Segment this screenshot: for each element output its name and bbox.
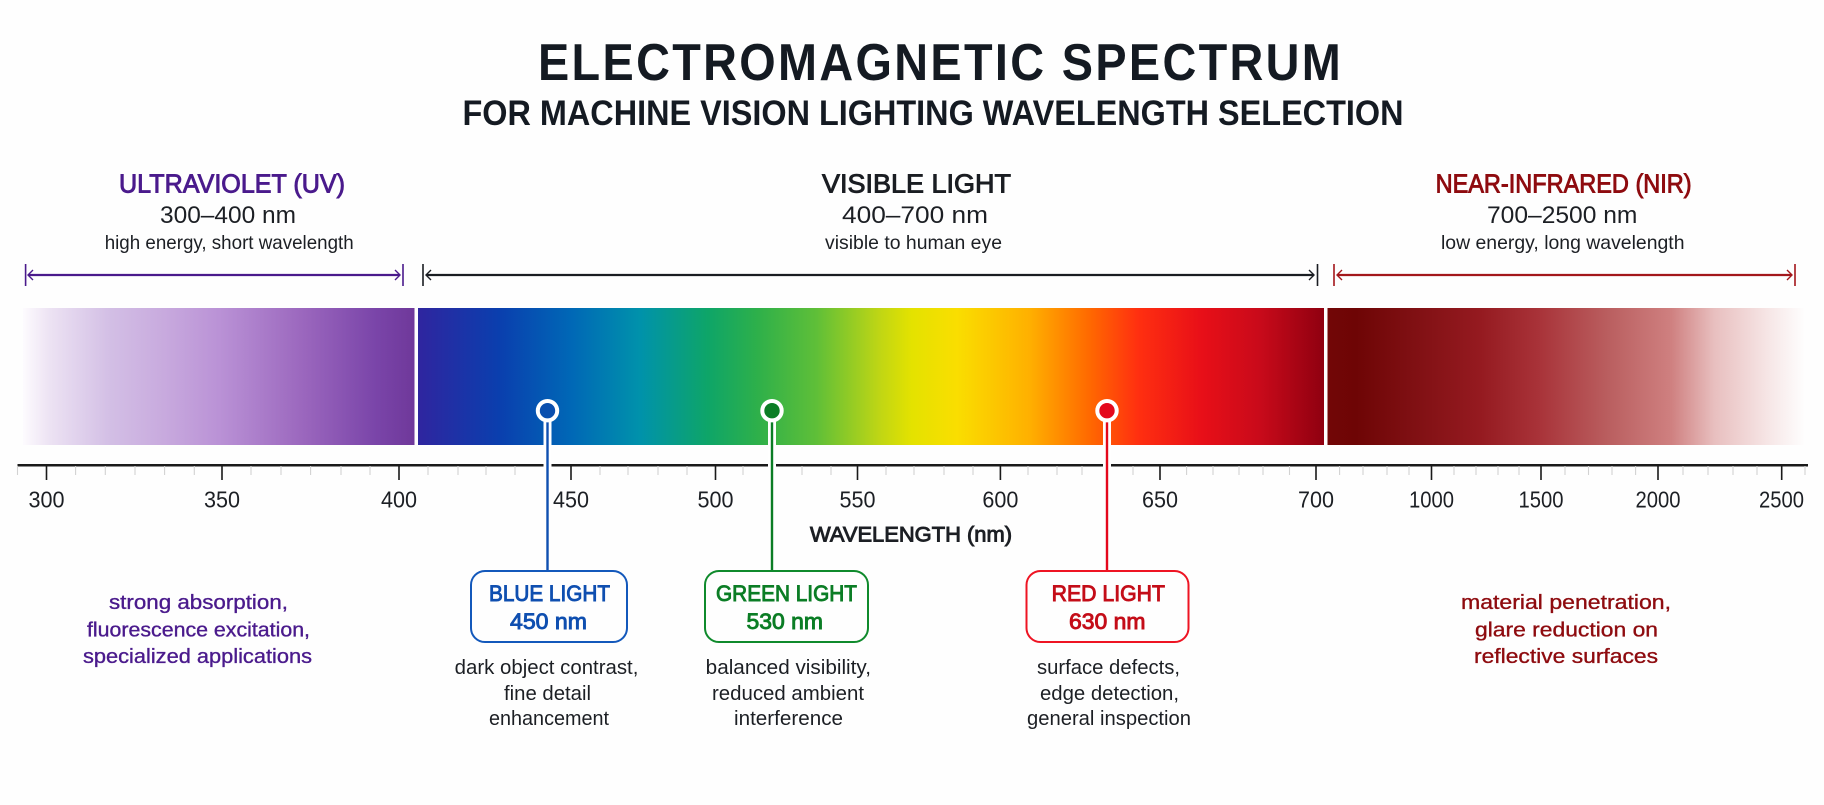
text: ultraviolet uses: specialized applications bbox=[83, 646, 312, 668]
panel: near-infrared header: low energy, long wavelength bbox=[1441, 232, 1684, 254]
panel: near-infrared header: NEAR-INFRARED (NIR) bbox=[1436, 168, 1692, 198]
wavelength axis: 550 bbox=[840, 486, 876, 512]
wavelength axis bbox=[18, 465, 1808, 512]
wavelength axis: 500 bbox=[698, 486, 734, 512]
wavelength axis: 2500 bbox=[1759, 486, 1804, 512]
spectrum bar: visible bbox=[418, 308, 1324, 445]
text: near-infrared uses: reflective surfaces bbox=[1474, 646, 1658, 668]
callout: blue light: BLUE LIGHT bbox=[489, 581, 610, 606]
text: ultraviolet uses: fluorescence excitation, bbox=[87, 620, 310, 642]
arrow: ultraviolet range bbox=[26, 264, 403, 286]
callout: green light: 530 nm bbox=[746, 609, 823, 634]
panel: visible light header: 400–700 nm bbox=[842, 202, 988, 229]
text: red light uses: surface defects, bbox=[1037, 657, 1180, 679]
text: green light uses: interference bbox=[734, 708, 843, 730]
wavelength axis: 400 bbox=[381, 486, 417, 512]
callout: red light: RED LIGHT bbox=[1052, 581, 1165, 606]
wavelength axis: 650 bbox=[1142, 486, 1178, 512]
wavelength axis: 350 bbox=[204, 486, 240, 512]
text: near-infrared uses: glare reduction on bbox=[1475, 620, 1658, 642]
spectrum bar: near-infrared bbox=[1328, 308, 1805, 445]
marker: green light bbox=[762, 401, 782, 571]
callout: red light bbox=[1026, 571, 1188, 642]
text: ultraviolet uses bbox=[83, 592, 312, 668]
panel: ultraviolet header bbox=[105, 168, 354, 254]
text: blue light uses: dark object contrast, bbox=[455, 657, 638, 679]
text: near-infrared uses: material penetration, bbox=[1461, 592, 1671, 614]
arrow: visible range bbox=[423, 264, 1318, 286]
panel: ultraviolet header: high energy, short wavelength bbox=[105, 232, 354, 254]
callout: green light bbox=[705, 571, 868, 642]
callout: blue light: 450 nm bbox=[510, 609, 587, 634]
panel: visible light header bbox=[822, 168, 1011, 254]
callout: blue light bbox=[471, 571, 627, 642]
text: near-infrared uses bbox=[1461, 592, 1671, 668]
wavelength axis: 2000 bbox=[1636, 486, 1680, 512]
subtitle: FOR MACHINE VISION LIGHTING WAVELENGTH SELECTION bbox=[462, 94, 1404, 133]
title: ELECTROMAGNETIC SPECTRUM bbox=[538, 34, 1341, 92]
panel: visible light header: VISIBLE LIGHT bbox=[822, 168, 1011, 198]
wavelength axis: 600 bbox=[982, 486, 1018, 512]
marker: red light bbox=[1097, 401, 1117, 571]
arrow: near-infrared range bbox=[1334, 264, 1795, 286]
panel: ultraviolet header: ULTRAVIOLET (UV) bbox=[119, 168, 345, 198]
text: blue light uses: fine detail bbox=[504, 683, 591, 705]
marker: blue light bbox=[538, 401, 557, 571]
text: blue light uses bbox=[455, 657, 638, 730]
wavelength axis: 450 bbox=[553, 486, 589, 512]
callout: red light: 630 nm bbox=[1069, 609, 1146, 634]
text: green light uses: balanced visibility, bbox=[706, 657, 871, 679]
spectrum bar: ultraviolet bbox=[23, 308, 414, 445]
panel: near-infrared header: 700–2500 nm bbox=[1487, 202, 1637, 229]
wavelength axis: 700 bbox=[1298, 486, 1334, 512]
text: red light uses: edge detection, bbox=[1040, 683, 1179, 705]
wavelength axis: 300 bbox=[28, 486, 64, 512]
panel: near-infrared header bbox=[1436, 168, 1692, 254]
text: green light uses: reduced ambient bbox=[712, 683, 864, 705]
text: red light uses: general inspection bbox=[1027, 708, 1191, 730]
wavelength axis: 1500 bbox=[1518, 486, 1564, 512]
wavelength axis: 1000 bbox=[1409, 486, 1454, 512]
text: ultraviolet uses: strong absorption, bbox=[109, 592, 288, 614]
text: red light uses bbox=[1027, 657, 1191, 730]
panel: visible light header: visible to human eye bbox=[825, 232, 1002, 254]
text: blue light uses: enhancement bbox=[489, 708, 609, 730]
axis label: WAVELENGTH (nm) bbox=[810, 524, 1012, 546]
panel: ultraviolet header: 300–400 nm bbox=[160, 202, 296, 229]
text: green light uses bbox=[706, 657, 871, 730]
callout: green light: GREEN LIGHT bbox=[716, 581, 857, 606]
